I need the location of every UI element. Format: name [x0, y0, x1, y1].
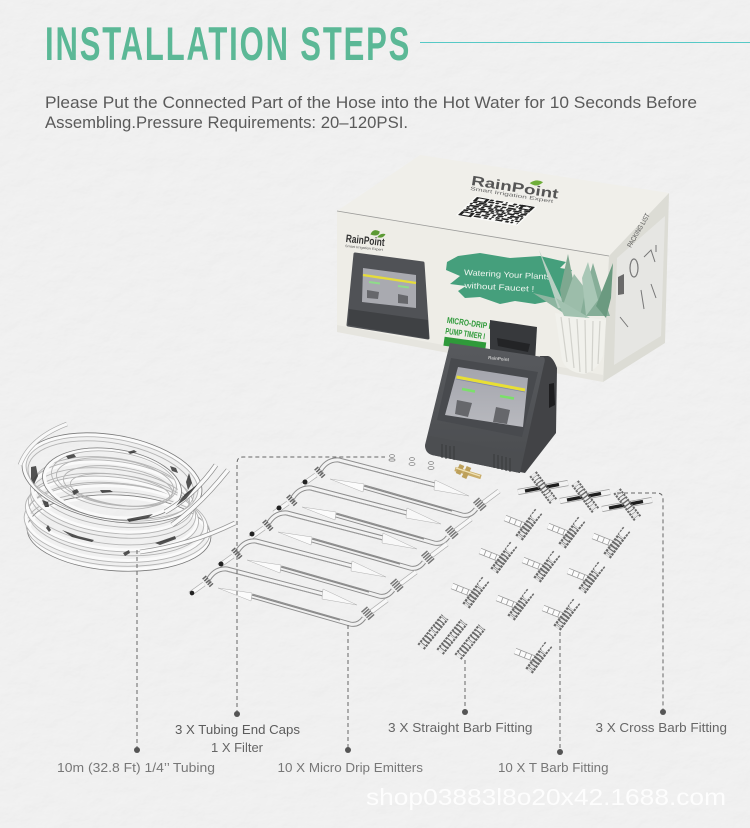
label: emitters: 10 X Micro Drip Emitters [278, 760, 423, 775]
device buttons [455, 400, 472, 417]
device front body [425, 343, 545, 473]
box front logo [345, 227, 386, 252]
dashed leader: tubing [134, 550, 140, 753]
tubing coil [15, 420, 235, 576]
micro drip emitters [190, 460, 499, 624]
T barb fittings [452, 510, 628, 671]
device side [510, 356, 557, 473]
label: end caps: 3 X Tubing End Caps [175, 722, 300, 737]
device brand: RainPoint [488, 355, 510, 362]
box right face [603, 193, 669, 382]
box front logo: Smart Irrigation Expert [345, 244, 383, 252]
QR code [456, 196, 537, 226]
watermark: shop03883l8o20x42.1688.com [366, 784, 726, 810]
instruction text [45, 93, 697, 132]
title rule [420, 42, 750, 44]
green product heading on box: MICRO-DRIP I [446, 315, 491, 331]
pump clip behind device [490, 320, 537, 362]
brass fitting [455, 465, 481, 478]
label: tubing: 10m (32.8 Ft) 1/4’’ Tubing [57, 760, 215, 775]
title: INSTALLATION STEPS [45, 19, 409, 71]
dashed leader: T barb [557, 632, 563, 755]
cross barb fittings [518, 474, 652, 519]
side connector [549, 383, 555, 408]
end caps and filter rings [389, 454, 434, 470]
green brush stroke with slogan [446, 253, 572, 304]
instruction text: Please Put the Connected Part of the Hose into the Hot Water for 10 Seconds Before [45, 93, 697, 112]
label: straight barb: 3 X Straight Barb Fitting [388, 720, 532, 735]
label: filter: 1 X Filter [211, 740, 264, 755]
dark reflections on tubing [31, 450, 198, 556]
green product heading on box [443, 315, 491, 352]
dashed leader: straight barb [462, 660, 468, 715]
dashed leader: end caps and filter [234, 457, 385, 717]
instruction text: Assembling.Pressure Requirements: 20–120PSI. [45, 113, 408, 132]
device bezel [437, 358, 538, 437]
tube ends [20, 424, 67, 465]
straight barb fittings [421, 617, 482, 657]
green brush stroke with slogan: Watering Your Plants [464, 268, 551, 282]
packing list panel [618, 212, 656, 327]
plant leaves [533, 250, 613, 318]
box front logo: RainPoint [345, 233, 385, 249]
device screen [445, 367, 528, 427]
box top face [337, 155, 669, 256]
green brush stroke with slogan: without Faucet ! [463, 281, 534, 294]
product box [337, 155, 669, 382]
green product heading on box: PUMP TIMER I [445, 326, 486, 341]
label: cross barb: 3 X Cross Barb Fitting [596, 720, 727, 735]
box top logo: Smart Irrigation Expert [470, 186, 555, 205]
label: T barb: 10 X T Barb Fitting [498, 760, 608, 775]
dashed leader: cross barb [617, 493, 666, 715]
device base [425, 436, 522, 473]
packing list panel: PACKING LIST [627, 212, 652, 249]
box top logo [470, 170, 561, 206]
box front face [337, 211, 609, 382]
pump timer device [425, 343, 557, 473]
plant pot [555, 313, 606, 374]
dashed leader: emitters [345, 625, 351, 753]
box top logo: RainPoint [470, 173, 560, 202]
device picture on box [348, 254, 429, 339]
